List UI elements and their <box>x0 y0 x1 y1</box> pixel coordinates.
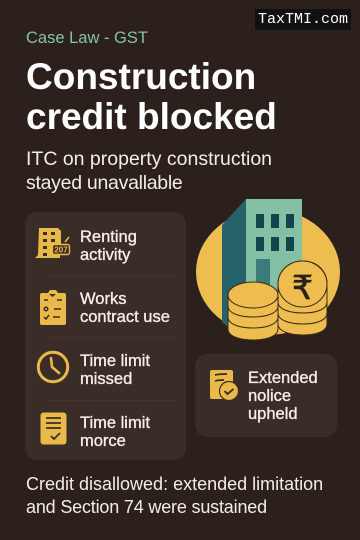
logo badge: TaxTMI.com <box>258 11 348 28</box>
panel: reasons <box>25 212 186 460</box>
label: renting activity <box>80 228 137 264</box>
coin stack right with rupee: ₹ <box>292 268 313 307</box>
label: extended nolice upheld: upheld <box>248 405 298 423</box>
label: works contract use: contract use <box>80 308 170 326</box>
label: extended nolice upheld: nolice <box>248 387 291 405</box>
label: renting activity: Renting <box>80 228 137 246</box>
label: extended nolice upheld <box>248 369 318 423</box>
card: extended notice upheld <box>195 354 337 437</box>
subtitle: ITC on property construction <box>26 148 272 170</box>
coin stack left <box>228 282 278 340</box>
conclusion text: Credit disallowed: extended limitation <box>26 474 323 494</box>
icon: clock <box>36 350 70 384</box>
title <box>26 56 277 137</box>
label: extended nolice upheld: Extended <box>248 369 318 387</box>
label: renting activity: activity <box>80 246 130 264</box>
icon: document with check <box>40 412 66 444</box>
icon: building with 207 tag <box>35 228 70 258</box>
subtitle: stayed unavallable <box>26 172 182 194</box>
label: works contract use <box>80 290 170 326</box>
illustration: building and rupee coins <box>196 199 340 340</box>
icon: building with 207 tag: 207 <box>54 246 68 254</box>
conclusion text: and Section 74 were sustained <box>26 496 267 516</box>
conclusion text <box>26 474 323 516</box>
label: time limit missed: missed <box>80 370 132 388</box>
title: Construction <box>26 56 256 97</box>
label: time limit missed: Time limit <box>80 352 150 370</box>
title: credit blocked <box>26 96 277 137</box>
category label: Case Law - GST <box>26 29 148 47</box>
label: time limit missed <box>80 352 150 388</box>
subtitle <box>26 148 272 194</box>
building <box>222 199 302 330</box>
yellow circle <box>196 209 340 335</box>
label: time limit morce: morce <box>80 432 126 450</box>
icon: notice with check badge <box>210 370 238 400</box>
label: time limit morce <box>80 414 150 450</box>
label: works contract use: Works <box>80 290 126 308</box>
label: time limit morce: Time limit <box>80 414 150 432</box>
icon: clipboard checklist <box>40 290 66 325</box>
coin stack right with rupee <box>278 261 327 335</box>
